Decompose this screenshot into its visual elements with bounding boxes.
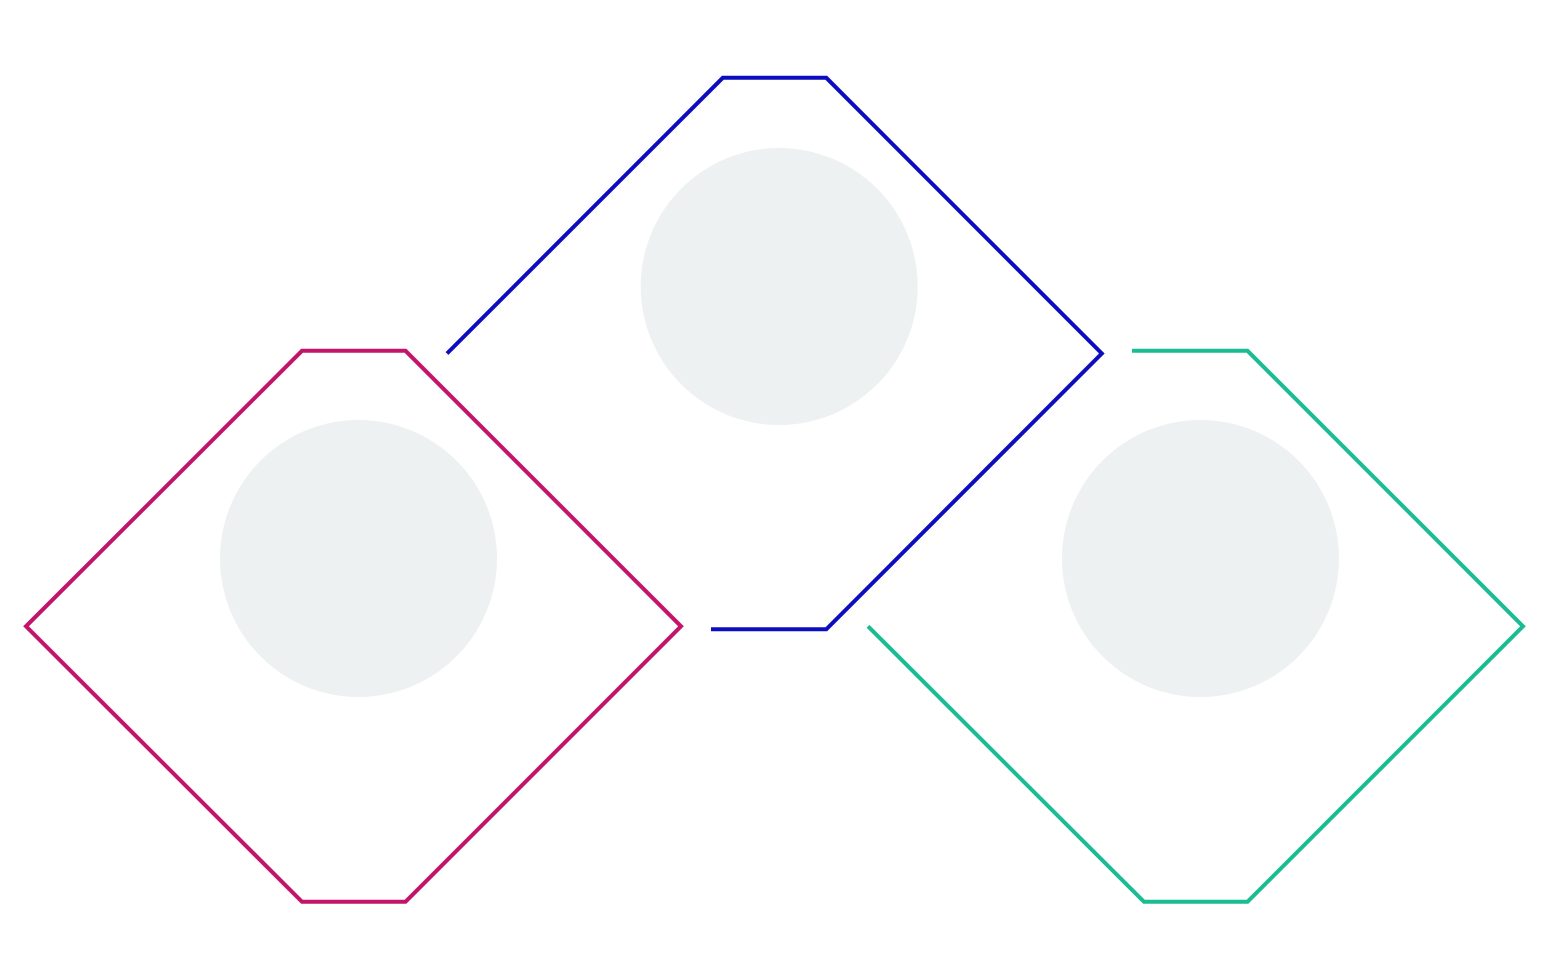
icon placeholder circle: left xyxy=(220,420,497,697)
hexagon outline: magenta xyxy=(26,351,681,902)
panel: center blue hexagon xyxy=(447,78,1102,629)
panel: left magenta hexagon xyxy=(26,351,681,902)
panel: right green hexagon xyxy=(868,351,1523,902)
icon placeholder circle: center xyxy=(641,148,918,425)
hexagon outline: blue open path xyxy=(447,78,1102,629)
icon placeholder circle: right xyxy=(1062,420,1339,697)
hexagon outline: green open path xyxy=(868,351,1523,902)
